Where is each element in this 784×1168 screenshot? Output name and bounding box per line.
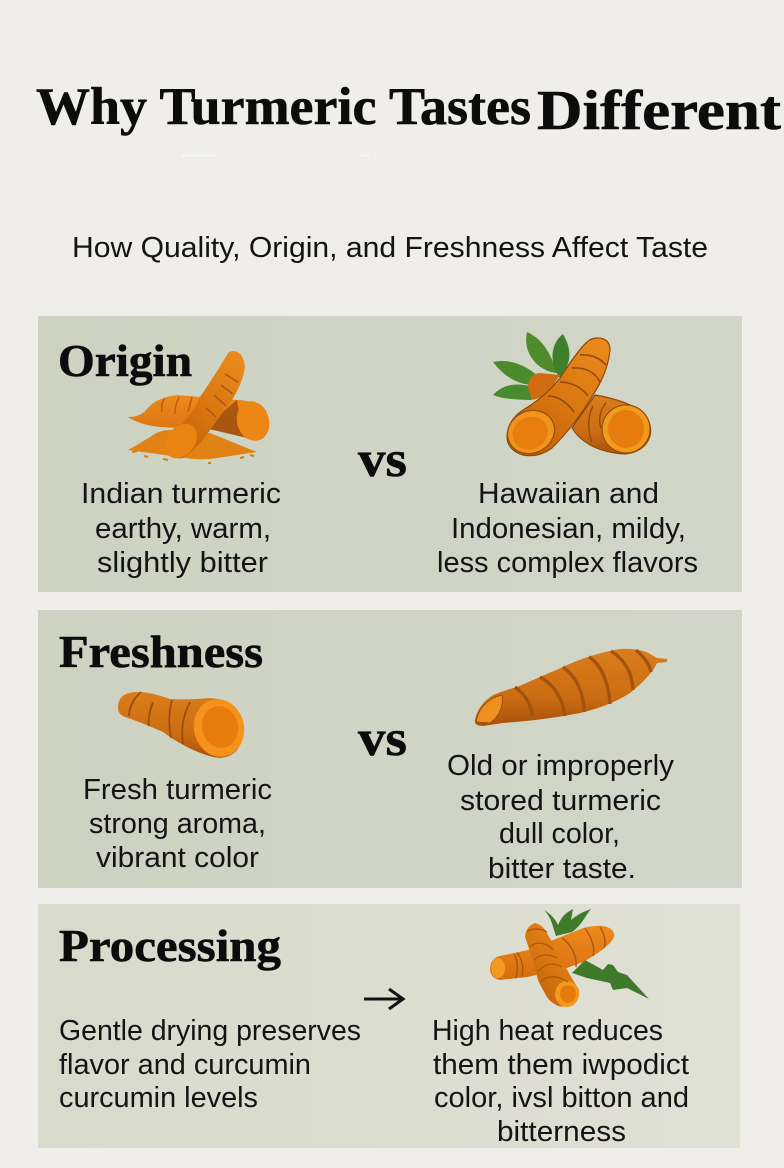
text: fresh turmeric: strong aroma, [89,808,266,840]
panel: freshness [38,610,742,888]
vs label: vs [358,432,407,488]
text: indian turmeric: slightly bitter [97,547,269,579]
icon: turmeric roots with powder [128,351,274,465]
icon: old turmeric [475,649,667,726]
text: hawaiian and indonesian: Indonesian, mildy, [451,513,686,545]
text: high heat: High heat reduces [432,1015,663,1047]
subtitle: How Quality, Origin, and Freshness Affect Taste [72,232,708,264]
vs label: vs [358,711,407,767]
text: old turmeric: Old or improperly [447,750,675,782]
text: gentle drying [59,1015,361,1114]
text: old turmeric: bitter taste. [488,853,636,885]
text: hawaiian and indonesian [437,478,698,579]
text: old turmeric: stored turmeric [460,785,661,817]
text: fresh turmeric: vibrant color [96,842,260,874]
text: indian turmeric: earthy, warm, [95,513,271,545]
title: Different [537,80,781,142]
text: fresh turmeric: Fresh turmeric [83,774,272,806]
text: fresh turmeric [83,774,272,874]
title [36,78,781,142]
icon: arrow [364,989,403,1009]
panel: processing [38,904,740,1148]
text: gentle drying: flavor and curcumin [59,1049,311,1081]
text: high heat: them them iwpodict [433,1049,689,1081]
text: gentle drying: curcumin levels [59,1082,258,1114]
text: old turmeric: dull color, [499,818,620,850]
title: Why Turmeric Tastes [36,78,531,136]
text: high heat: color, ivsl bitton and [434,1082,689,1114]
heading: freshness: Freshness [59,627,263,677]
icon: turmeric roots with herbs [490,909,649,1007]
icon: turmeric roots with leaves [493,332,651,461]
heading: origin: Origin [58,336,192,386]
text: old turmeric [447,750,675,885]
heading: processing: Processing [59,921,282,971]
text: indian turmeric [81,478,281,579]
icon: fresh turmeric [118,692,249,762]
text: indian turmeric: Indian turmeric [81,478,281,510]
text: high heat: bitterness [497,1116,626,1148]
text: high heat [432,1015,689,1148]
text: gentle drying: Gentle drying preserves [59,1015,361,1047]
panel: origin [38,316,742,592]
text: hawaiian and indonesian: less complex flavors [437,547,698,579]
text: hawaiian and indonesian: Hawaiian and [478,478,659,510]
